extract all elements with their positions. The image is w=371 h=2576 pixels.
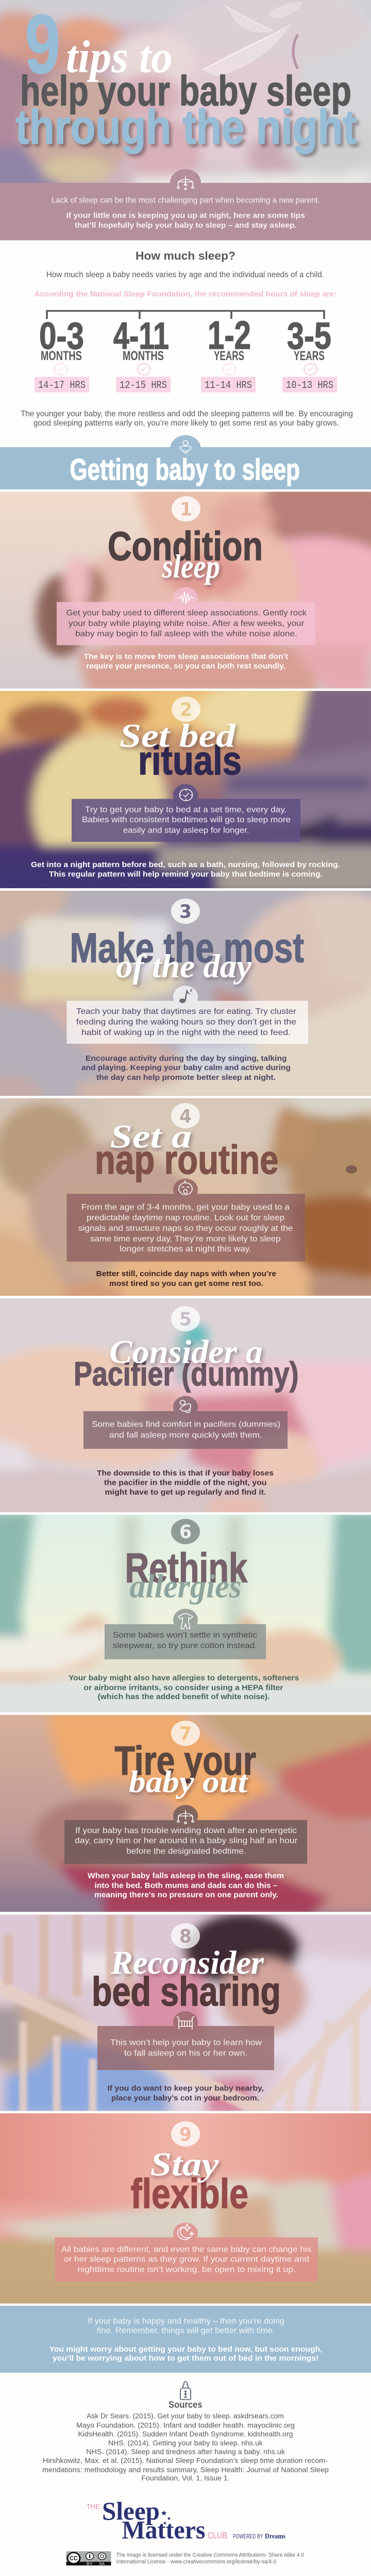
text box	[64, 1805, 307, 1864]
text box	[97, 2011, 274, 2070]
heading: nap routine	[95, 1137, 279, 1182]
panel: tip 5 consider a pacifier	[0, 1298, 371, 1518]
heading	[95, 1118, 278, 1182]
body text: and fall asleep more quickly with them.	[109, 1430, 262, 1439]
photo: baby with pacifier	[0, 1298, 371, 1518]
heading: Set a	[110, 1118, 192, 1155]
photo: baby on bed by window	[0, 1512, 371, 1719]
key point: or airborne irritants, so consider using a HEPA filter	[83, 1684, 283, 1692]
reassurance text: If your baby is happy and healthy – then you’re doing	[88, 2316, 284, 2326]
text: sleep needs: How much sleep a baby needs varies by age and the individual needs of a child.	[46, 270, 324, 279]
number badge	[172, 496, 200, 521]
icon: music note	[179, 989, 193, 1003]
age 3-5 years: 3-5	[287, 315, 331, 357]
logo: the sleep matters club: Matters	[122, 2516, 206, 2544]
key point	[83, 653, 289, 670]
body text	[61, 2245, 311, 2274]
icon: pacifier	[176, 1398, 194, 1415]
number badge: 9	[179, 2124, 192, 2145]
intro text	[52, 195, 320, 230]
title: tips to	[66, 32, 173, 82]
body text	[82, 805, 291, 835]
age 1-2 years: 1-2	[208, 313, 251, 358]
heading: Reconsider	[110, 1944, 264, 1981]
photo: alarm clock and books	[0, 680, 371, 894]
key point: place your baby’s cot in your bedroom.	[111, 2094, 259, 2103]
intro text: Lack of sleep can be the most challenging part when becoming a new parent.	[52, 195, 320, 205]
key point: most tired so you can get some rest too.	[109, 1280, 263, 1288]
body text: Babies with consistent bedtimes will go to sleep more	[82, 815, 291, 824]
intro text: If your little one is keeping you up at night, here are some tips	[66, 212, 305, 220]
eyelash	[293, 35, 298, 69]
key point: Better still, coincide day naps with when you’re	[96, 1270, 276, 1278]
age 1-2 years	[201, 313, 256, 393]
age 3-5 years: 10-13 HRS	[286, 379, 333, 391]
photo: swaddled baby on salmon background	[0, 2113, 371, 2311]
body text: signals and structure naps so they occur roughly at the	[78, 1224, 293, 1233]
key point	[107, 2084, 264, 2103]
logo: the sleep matters club: POWERED BY	[233, 2533, 263, 2540]
text: recommendation: According the National Sleep Foundation, the recommended hours of sleep are:	[34, 290, 337, 298]
body text	[110, 2038, 262, 2058]
number badge: 8	[179, 1926, 192, 1947]
panel: tip 2 set bed rituals	[0, 680, 371, 894]
body text: This won’t help your baby to learn how	[110, 2038, 262, 2047]
body text: longer stretches at night this way.	[120, 1244, 251, 1253]
key point: The downside to this is that if your baby loses	[97, 1469, 274, 1478]
banner: getting baby to sleep	[0, 435, 371, 489]
heading	[131, 2146, 248, 2217]
heading	[92, 1944, 281, 2014]
list: sources: Foundation, Vol. 1, Issue 1.	[141, 2474, 229, 2482]
body text: Some babies won’t settle in synthetic	[113, 1631, 257, 1640]
panel: tip 8 reconsider bed sharing	[0, 1914, 371, 2114]
age 0-3 months: 0-3	[39, 315, 84, 357]
panel: closing message	[0, 2306, 371, 2372]
body text	[66, 608, 307, 638]
heading: allergies	[130, 1568, 242, 1605]
body text: feeding during the waking hours so they don’t get in the	[76, 1017, 296, 1026]
panel: tip 4 set a nap routine	[0, 1098, 371, 1296]
icon: waveform	[177, 592, 194, 604]
number badge	[171, 1923, 200, 1948]
text: license: The image is licensed under the Creative Commons Attributions- Share Alike 4.0	[116, 2551, 304, 2558]
heading: sleep	[162, 548, 220, 585]
number badge: 2	[180, 699, 192, 720]
icon: clock	[179, 789, 193, 801]
age 1-2 years: 11-14 HRS	[205, 379, 252, 391]
bear nose	[346, 1165, 357, 1174]
heading: bed sharing	[92, 1969, 281, 2014]
key point: into the bed. Both mums and dads can do this –	[95, 1882, 278, 1890]
key point: This regular pattern will help remind your baby that bedtime is coming.	[49, 870, 323, 878]
logo: the sleep matters club: THE	[87, 2503, 100, 2511]
number badge	[171, 1519, 200, 1544]
heading: Condition	[108, 524, 263, 569]
body text: before the designated bedtime.	[127, 1846, 246, 1856]
closing text: You might worry about getting your baby to bed now, but soon enough,	[49, 2345, 322, 2353]
body text	[76, 1007, 296, 1037]
age 3-5 years: YEARS	[294, 349, 325, 363]
closing text: you’ll be worrying about how to get them out of bed in the mornings!	[53, 2354, 318, 2363]
heading: Tire your	[114, 1738, 256, 1783]
number badge: 7	[179, 1723, 192, 1744]
list: sources: NHS. (2014). Sleep and tiredness after having a baby. nhs.uk	[87, 2448, 285, 2456]
icon: pacifier	[180, 440, 191, 453]
heading	[114, 1738, 256, 1799]
number badge	[171, 1306, 200, 1331]
panel: tip 7 tire your baby out	[0, 1711, 371, 1916]
body text: easily and stay asleep for longer.	[123, 825, 249, 835]
body text	[78, 1202, 293, 1253]
heading: Pacifier (dummy)	[74, 1355, 299, 1393]
body text: same time every day. They’re more likely to sleep	[90, 1234, 281, 1243]
list: sources: mendations: methodology and results summary, Sleep Health: Journal of National Sleep	[42, 2466, 329, 2474]
intro text: that’ll hopefully help your baby to sleep – and stay asleep.	[75, 222, 297, 230]
age 4-11 months: MONTHS	[123, 349, 164, 363]
key point: If you do want to keep your baby nearby,	[107, 2084, 264, 2093]
key point: require your presence, so you can both rest soundly.	[86, 662, 285, 670]
feathers	[202, 2, 304, 76]
key point: meaning there’s no pressure on one parent only.	[94, 1891, 278, 1899]
age 4-11 months: 12-15 HRS	[120, 379, 167, 391]
body text: Teach your baby that daytimes are for eating. Try cluster	[76, 1007, 296, 1016]
key point	[88, 1872, 284, 1899]
body text: baby may begin to fall asleep with the white noise alone.	[75, 629, 297, 638]
bracket	[47, 311, 324, 319]
body text: day, carry him or her around in a baby sling half an hour	[75, 1836, 298, 1845]
list: sources: KidsHealth. (2015). Sudden Infant Death Syndrome. kidshealth.org	[78, 2430, 293, 2438]
photo: toddler in cot	[0, 1914, 371, 2114]
photo: baby feeding from bottle	[0, 887, 371, 1103]
heading: Set bed	[120, 717, 236, 754]
body text: or her sleep patterns as they grow. If your current daytime and	[64, 2255, 309, 2264]
text box	[67, 986, 308, 1044]
heading: Consider a	[109, 1333, 263, 1370]
body text: If your baby has trouble winding down after an energetic	[75, 1826, 297, 1835]
heading: Rethink	[125, 1545, 247, 1591]
body text: predictable daytime nap routine. Look out for sleep	[87, 1213, 284, 1222]
body text: habit of waking up in the night with the need to feed.	[81, 1028, 291, 1037]
body text: nighttime routine isn’t working, be open to mixing it up.	[78, 2265, 296, 2274]
body text	[92, 1419, 280, 1439]
key point: Encourage activity during the day by singing, talking	[86, 1055, 286, 1063]
key point: and playing. Keeping your baby calm and active during	[81, 1064, 291, 1072]
icon: baby mobile	[177, 1810, 194, 1824]
key point: might have to get up regularly and find it.	[105, 1488, 266, 1497]
badge: creative commons: SA	[99, 2562, 105, 2566]
heading	[125, 1545, 247, 1605]
key point	[31, 861, 340, 878]
icon: baby mobile	[177, 176, 194, 190]
heading: of the day	[116, 948, 252, 985]
number badge: 4	[179, 1106, 192, 1127]
panel: tip 9 stay flexible	[0, 2113, 371, 2311]
photo: newborn in sling	[0, 1711, 371, 1916]
age 0-3 months: MONTHS	[41, 349, 82, 363]
logo: the sleep matters club: Sleep	[102, 2497, 160, 2526]
text: younger baby paragraph	[21, 409, 353, 428]
text box	[55, 2223, 318, 2281]
photo: baby in knit hat with teddy bear	[0, 1098, 371, 1296]
logo: the sleep matters club: Dreams	[265, 2533, 285, 2540]
text box	[72, 784, 300, 842]
panel: tip 3 make the most of the day	[0, 887, 371, 1103]
heading: sources: Sources	[168, 2400, 202, 2410]
heading: flexible	[131, 2171, 248, 2217]
age 4-11 months	[113, 315, 171, 393]
logo: the sleep matters club: CLUB	[208, 2531, 227, 2541]
number badge: 6	[179, 1521, 192, 1543]
number badge: 5	[179, 1309, 192, 1330]
panel: intro band	[0, 169, 371, 240]
photo: sleeping baby in arms	[0, 478, 371, 694]
text box	[67, 1179, 305, 1262]
icon: onesie	[178, 1614, 193, 1629]
number badge	[171, 1721, 200, 1746]
body text	[113, 1631, 257, 1650]
badge: creative commons: BY	[87, 2562, 93, 2566]
icon: moon and stars	[178, 2224, 194, 2240]
age 4-11 months: 4-11	[113, 315, 169, 357]
body text: Get your baby used to different sleep associations. Gently rock	[66, 608, 307, 617]
heading	[120, 717, 242, 783]
list: sources: Ask Dr Sears. (2015). Get your baby to sleep. askdrsears.com	[87, 2412, 284, 2420]
cot rails	[0, 1914, 371, 2114]
key point: When your baby falls asleep in the sling, ease them	[88, 1872, 284, 1880]
badge: creative commons: CC	[70, 2555, 78, 2562]
panel: hero	[0, 0, 371, 193]
number badge: 3	[179, 901, 192, 922]
number badge	[171, 2121, 200, 2147]
age 3-5 years	[282, 315, 337, 393]
title	[15, 0, 357, 154]
body text: All babies are different, and even the same baby can change his	[61, 2245, 311, 2254]
photo: baby and alarm clock	[0, 0, 371, 193]
panel: tip 1 condition sleep	[0, 478, 371, 694]
text box	[105, 1609, 266, 1659]
text: license	[116, 2551, 304, 2565]
list: sources: Hirshkowitz, Max. et al. (2015). National Sleep Foundation’s sleep time duration recom-	[43, 2456, 328, 2465]
icon: crib	[177, 2017, 194, 2029]
body text: Try to get your baby to bed at a set time, every day.	[85, 805, 287, 814]
number badge	[171, 899, 200, 924]
heading: how much sleep: How much sleep?	[136, 250, 235, 263]
heading: Stay	[150, 2146, 219, 2182]
body text: sleepwear, so try pure cotton instead.	[113, 1641, 257, 1650]
age 0-3 months: 14-17 HRS	[38, 379, 86, 391]
badge: creative commons	[66, 2551, 111, 2566]
body text: From the age of 3-4 months, get your baby used to a	[81, 1202, 290, 1212]
logo: the sleep matters club	[87, 2497, 285, 2544]
key point: Your baby might also have allergies to detergents, softeners	[69, 1674, 299, 1682]
reassurance text: fine. Remember, things will get better with time.	[97, 2326, 275, 2335]
body text: Some babies find comfort in pacifiers (dummies)	[92, 1419, 280, 1429]
text: license: International License - www.creativecommons.org/license/by-sa/4.0	[116, 2558, 276, 2565]
heading: rituals	[138, 738, 242, 783]
age 0-3 months	[35, 315, 89, 393]
body text	[75, 1826, 298, 1856]
key point	[81, 1055, 291, 1082]
chart: recommended sleep by age	[35, 311, 337, 393]
key point	[96, 1270, 276, 1288]
number badge	[171, 1103, 200, 1128]
reassurance text	[88, 2316, 284, 2335]
list: sources: NHS. (2014). Getting your baby to sleep. nhs.uk	[108, 2439, 263, 2447]
key point: the pacifier in the middle of the night, you	[104, 1479, 267, 1487]
key point: Get into a night pattern before bed, such as a bath, nursing, followed by rocking.	[31, 861, 340, 869]
number badge: 1	[180, 499, 192, 520]
key point: (which has the added benefit of white noise).	[98, 1693, 269, 1701]
key point: The key is to move from sleep associations that don’t	[83, 653, 289, 661]
body text: your baby while playing white noise. After a few weeks, your	[69, 619, 305, 628]
panel: tip 6 rethink allergies	[0, 1512, 371, 1719]
text box	[57, 587, 315, 645]
text box	[83, 1396, 288, 1449]
body text: to fall asleep on his or her own.	[124, 2048, 247, 2058]
key point	[69, 1674, 299, 1701]
closing text	[49, 2345, 322, 2363]
heading	[74, 1333, 299, 1393]
key point	[97, 1469, 274, 1497]
list: sources: Mayo Foundation. (2015). Infant and toddler health. mayoclinic.org	[76, 2421, 295, 2430]
heading: baby out	[129, 1765, 248, 1799]
number badge	[172, 697, 200, 722]
age 1-2 years: YEARS	[214, 349, 244, 363]
heading	[108, 524, 263, 585]
icon: baby bottle	[180, 2381, 191, 2400]
icon: baby face	[179, 1180, 192, 1195]
key point: the day can help promote better sleep at night.	[96, 1074, 276, 1082]
heading	[70, 925, 304, 985]
list: sources	[42, 2412, 329, 2482]
